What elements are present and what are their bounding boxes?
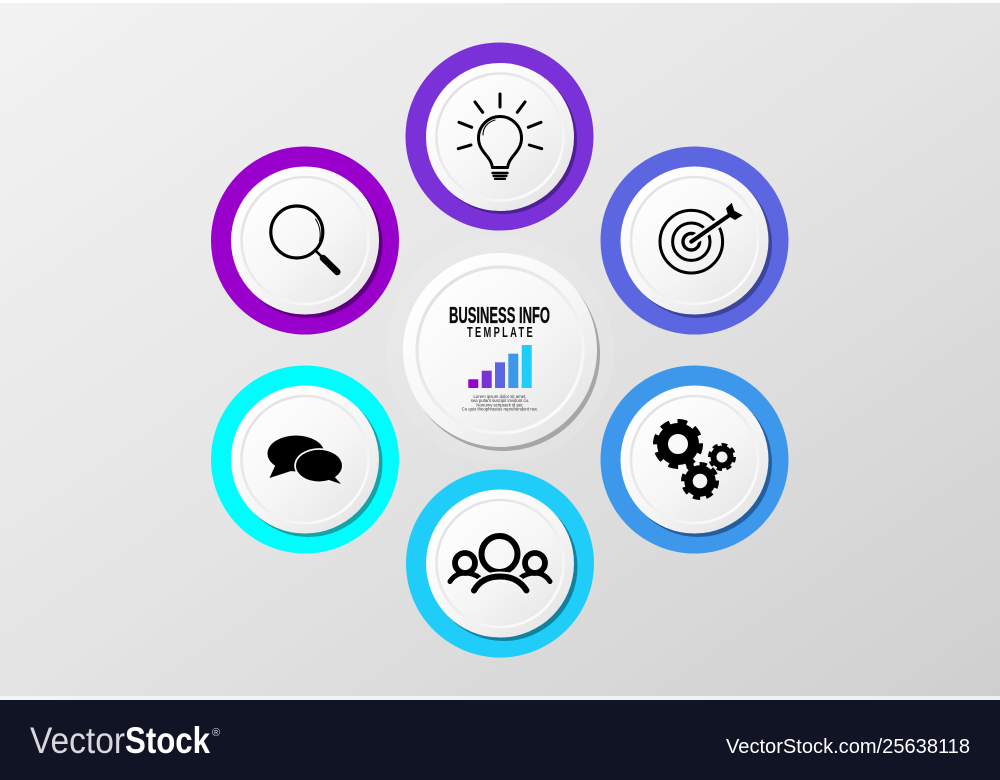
icon: gears bbox=[656, 422, 734, 498]
watermark logo: Vector bbox=[30, 720, 125, 761]
text block: lorem ipsum: Lorem ipsum dolor sit amet, bbox=[473, 394, 527, 399]
text block: lorem ipsum: sea putant suscipit invidunt cu. bbox=[471, 398, 529, 403]
panel: top circle, light bulb bbox=[406, 42, 594, 230]
icon: target with arrow bbox=[660, 203, 743, 273]
bar chart bbox=[468, 345, 532, 388]
watermark id: VectorStock.com/25638118 bbox=[726, 736, 970, 758]
icon: speech bubbles bbox=[268, 436, 344, 484]
watermark logo: ® bbox=[212, 727, 220, 739]
panel: lower left circle, speech bubbles bbox=[211, 366, 399, 554]
panel: upper right circle, target bbox=[600, 146, 788, 334]
watermark logo bbox=[30, 720, 220, 761]
icon: three people bbox=[450, 536, 550, 590]
title: BUSINESS INFO bbox=[449, 302, 550, 328]
subtitle: TEMPLATE bbox=[467, 324, 533, 341]
text block: lorem ipsum: Cu quis theophrastus reprehendunt nec. bbox=[462, 407, 538, 412]
panel: centre business info disc bbox=[403, 253, 600, 451]
panel: lower right circle, gears bbox=[600, 366, 788, 554]
footer bar bbox=[0, 700, 1000, 780]
watermark logo: Stock bbox=[125, 720, 210, 761]
icon: light bulb bbox=[458, 94, 542, 179]
central glow halo bbox=[386, 236, 614, 464]
text block: lorem ipsum bbox=[462, 394, 538, 412]
footer strip bbox=[0, 696, 1000, 700]
icon: magnifying glass bbox=[271, 206, 337, 272]
panel: upper left circle, magnifier bbox=[211, 146, 399, 334]
panel: bottom circle, people bbox=[406, 470, 594, 658]
text block: lorem ipsum: Nonumy scripserit id per. bbox=[476, 402, 524, 407]
